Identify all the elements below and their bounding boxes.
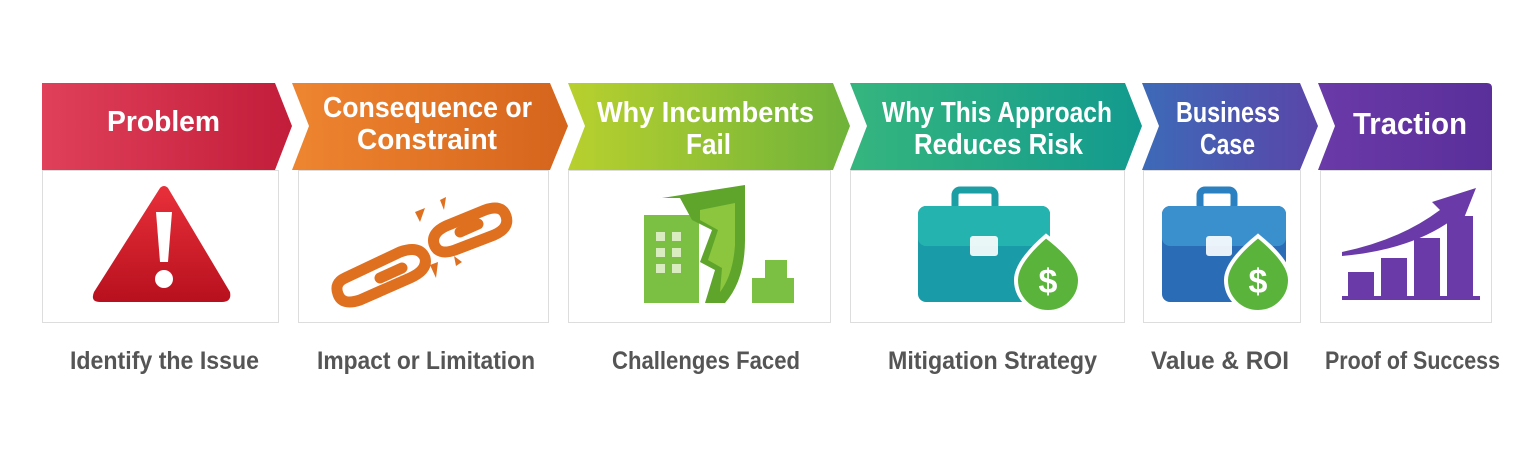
caption: Value & ROI: Value & ROI: [1151, 347, 1289, 375]
header: Why This Approach Reduces Risk: [850, 83, 1142, 170]
panel: why incumbents fail: [568, 83, 850, 375]
header: Why This Approach Reduces Risk: Reduces Risk: [914, 129, 1084, 161]
box: briefcase icon: [850, 170, 1124, 322]
panel: traction: [1318, 83, 1500, 375]
icon: briefcase with dollar: $: [1249, 263, 1268, 301]
box: growth chart icon: [1320, 170, 1492, 322]
panel: why this approach: [850, 83, 1142, 375]
header: Problem: Problem: [107, 106, 220, 138]
header: Why Incumbents Fail: [568, 83, 850, 170]
panel: problem: [42, 83, 292, 375]
header: Consequence or Constraint: [292, 83, 568, 170]
icon: briefcase with dollar: [1162, 190, 1290, 312]
panel: business case: [1142, 83, 1318, 375]
panel: consequence: [292, 83, 568, 375]
caption: Challenges Faced: Challenges Faced: [612, 347, 800, 375]
caption: Proof of Success: Proof of Success: [1325, 347, 1500, 375]
icon: briefcase with dollar: $: [1039, 263, 1058, 301]
header: Why This Approach Reduces Risk: Why This Approach: [882, 97, 1112, 129]
caption: Identify the Issue: Identify the Issue: [70, 347, 259, 375]
caption: Impact or Limitation: Impact or Limitation: [317, 347, 535, 375]
box: building & shield icon: [568, 170, 830, 322]
icon: bar chart with arrow: [1342, 188, 1480, 300]
box: chain icon: [298, 170, 548, 322]
header: Business Case: Case: [1200, 129, 1255, 161]
icon: warning triangle: [93, 186, 230, 302]
header: Traction: Traction: [1353, 106, 1467, 141]
icon: briefcase with dollar: [918, 190, 1080, 312]
box: problem icon: [42, 170, 278, 322]
header: Why Incumbents Fail: Why Incumbents: [597, 97, 814, 129]
header: Problem: [42, 83, 292, 170]
header: Business Case: Business: [1176, 97, 1280, 129]
icon: broken chain: [337, 208, 507, 302]
header: Traction: [1318, 83, 1492, 170]
header: Consequence or Constraint: Consequence or: [323, 92, 532, 124]
header: Business Case: [1142, 83, 1318, 170]
box: briefcase icon: [1144, 170, 1300, 322]
header: Consequence or Constraint: Constraint: [357, 124, 497, 156]
header: Why Incumbents Fail: Fail: [686, 129, 731, 161]
caption: Mitigation Strategy: Mitigation Strategy: [888, 347, 1097, 375]
icon: building and shield: [644, 185, 794, 303]
